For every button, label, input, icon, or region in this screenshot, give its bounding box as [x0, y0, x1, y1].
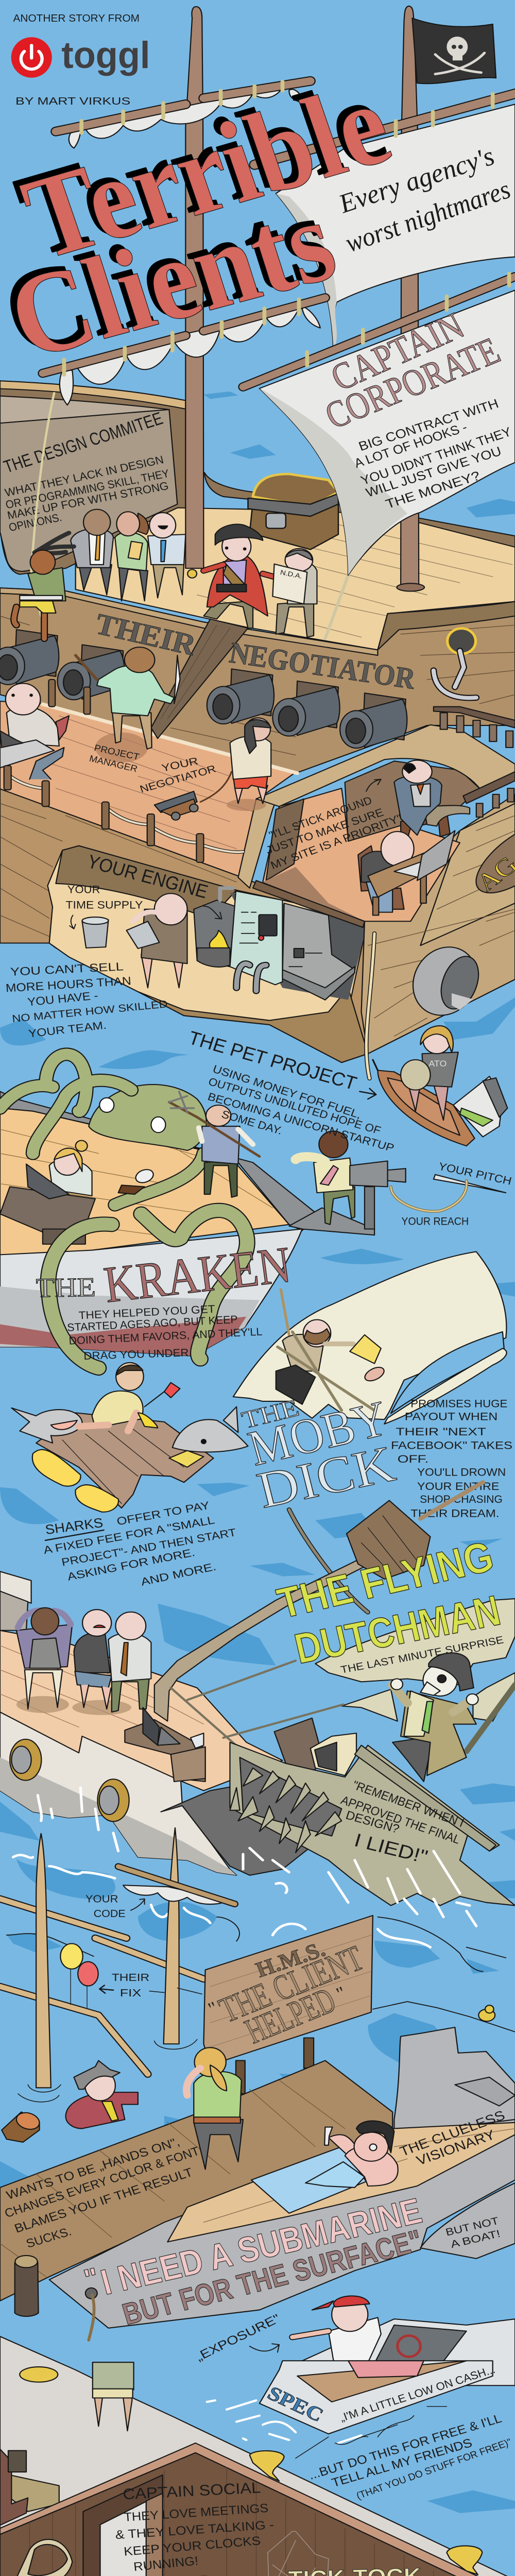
desk with laptop [125, 1707, 205, 1782]
your engine label: YOUR ENGINE [85, 851, 210, 903]
captain social text [115, 2479, 274, 2574]
mooring post [15, 2256, 39, 2316]
sign lettering: H.M.S. [252, 1937, 329, 1982]
moby dick heading: MOBY [243, 1390, 394, 1476]
kraken text: DOING THEM FAVORS, AND THEY'LL [68, 1325, 263, 1347]
captain social text: RUNNING! [133, 2554, 199, 2574]
flagpole mast [401, 6, 419, 588]
hull name text: THEIR [92, 607, 200, 662]
section: hms the client helped and the submarine [0, 1828, 515, 2364]
bollards [20, 2367, 482, 2574]
arrow to eye patch captain [366, 779, 381, 791]
title: Terrible Clients [0, 54, 405, 384]
captain corporate text: WILL JUST GIVE YOU [364, 444, 503, 500]
portholes [10, 1739, 129, 1821]
credit: another story from: ANOTHER STORY FROM [13, 13, 140, 24]
kraken text: STARTED AGES AGO, BUT KEEP [67, 1313, 238, 1334]
promises text start: PROMISES HUGE [410, 1398, 507, 1410]
submarine heading [80, 2191, 426, 2331]
poster illustration, lower [0, 2336, 515, 2576]
section: the kraken and pet project [0, 960, 515, 1424]
hms sign [203, 1916, 373, 2094]
right lower yard [243, 274, 515, 387]
mooring rope [366, 934, 374, 1078]
deck plank lines [0, 1126, 272, 1244]
captain corporate text: A LOT OF HOOKS - [352, 420, 469, 471]
moby dick text [391, 1426, 512, 1519]
stern name sign [464, 810, 515, 905]
your negotiator label: NEGOTIATOR [139, 763, 217, 795]
left masts and yards [0, 1828, 235, 2088]
upper hull side [0, 588, 515, 773]
captain social text: CAPTAIN SOCIAL [123, 2479, 261, 2503]
deck rope posts [4, 680, 243, 862]
pet project arrow [359, 1089, 376, 1099]
time text: NO MATTER HOW SKILLED [11, 998, 168, 1025]
balcony railings [434, 707, 515, 817]
dock text [3, 2135, 201, 2251]
scared staff figures [16, 1608, 151, 1715]
captain corporate heading: CAPTAIN [324, 304, 471, 399]
sea patches near whale [320, 1249, 515, 1293]
their fix label: THEIR [112, 1972, 149, 1984]
upper yard [56, 81, 311, 133]
rubber duck [478, 2005, 495, 2021]
swinging girl with rope [14, 393, 74, 639]
section: sharks, moby dick and flying dutchman [0, 1363, 515, 1906]
big top sail [276, 104, 515, 349]
time text [5, 960, 168, 1040]
pet project client figure: ATO [428, 1059, 447, 1069]
but not a boat text [444, 2215, 502, 2250]
eye patch captain figure [394, 760, 470, 840]
submarine heading: BUT FOR THE SURFACE" [118, 2224, 426, 2331]
crows nest barrel [347, 1482, 483, 1579]
time text: YOU HAVE - [27, 989, 99, 1008]
shark left [11, 1408, 82, 1443]
rope to sail [325, 575, 348, 639]
dock text: CHANGES EVERY COLOR & FONT [3, 2144, 201, 2221]
whale jaw [384, 1348, 507, 1424]
moby dick heading [238, 1390, 400, 1519]
crates on pier [0, 2449, 59, 2526]
title: Terrible Clients: Clients [0, 171, 344, 381]
sharks text: A FIXED FEE FOR A "SMALL [42, 1514, 216, 1556]
sign lettering: " [333, 1982, 349, 2004]
toggl logo [11, 35, 150, 78]
sub mooring rope [89, 2295, 94, 2340]
free work text: TELL ALL MY FRIENDS [330, 2436, 474, 2490]
byline: BY MART VIRKUS [15, 96, 130, 107]
sign lettering: THE CLIENT [213, 1938, 370, 2030]
cabin speech label [264, 794, 404, 872]
sharks text: OFFER TO PAY [115, 1499, 211, 1528]
your reach label: YOUR REACH [401, 1215, 469, 1227]
but not a boat text: A BOAT! [449, 2228, 502, 2250]
flying dutchman heading [272, 1533, 505, 1673]
pet project text: SOME DAY. [220, 1108, 284, 1137]
sign lettering [205, 1937, 370, 2051]
stern wall of white ship [0, 1571, 31, 1603]
the kraken heading: KRAKEN [100, 1235, 294, 1313]
hull name text [92, 607, 418, 696]
spec name: SPEC [264, 2382, 327, 2426]
second yard [254, 94, 515, 165]
the kraken heading: THE [36, 1272, 96, 1303]
toy cannon on leash [154, 791, 198, 820]
white ship deck [0, 1631, 283, 1791]
anchor and ring [434, 629, 476, 698]
pet project text [206, 1062, 396, 1154]
teal control console [230, 891, 283, 991]
committee figures [71, 510, 185, 601]
captain corporate figure [187, 524, 279, 628]
sharks text: ASKING FOR MORE. [66, 1546, 196, 1583]
hull name text: NEGOTIATOR [227, 636, 418, 696]
captain corporate text: YOU DIDN'T THINK THEY [359, 425, 513, 488]
clueless visionary figure [305, 2121, 398, 2188]
upper deck [76, 508, 515, 650]
moby dick heading: DICK [251, 1435, 400, 1519]
figure on pier [93, 2362, 134, 2431]
ghost sail lower [341, 1673, 515, 1721]
wooden sub deck [167, 2123, 515, 2242]
moby dick whale [233, 1252, 507, 1424]
man holding woman [108, 1612, 151, 1712]
the kraken heading [36, 1235, 294, 1313]
their fix label: FIX [120, 1988, 141, 1999]
label: design committee [1, 408, 170, 534]
label: design committee: OR PROGRAMMING SKILL, THEY [4, 467, 170, 511]
moby dick text: OFF. [398, 1453, 428, 1465]
but not a boat text: BUT NOT [444, 2215, 500, 2238]
your pitch label: YOUR PITCH [437, 1160, 513, 1188]
wave lines [7, 1917, 515, 2032]
cabin speech label: JUST TO MAKE SURE [264, 806, 385, 857]
title: Terrible Clients: Clients [0, 174, 349, 384]
moby dick heading: THE [238, 1394, 302, 1434]
pet project boat [373, 1060, 507, 1146]
dock text: BLAMES YOU IF THE RESULT [13, 2166, 195, 2235]
kraken text: THEY HELPED YOU GET [78, 1302, 215, 1321]
title: Terrible Clients: Terrible [3, 54, 399, 281]
kraken desk worker [0, 1141, 95, 1244]
ghost ropes [171, 1660, 344, 1754]
far bulwark [204, 472, 515, 548]
project manager label [88, 742, 141, 774]
dock [0, 2061, 392, 2301]
submarine tower [394, 2027, 515, 2134]
shark right [169, 1407, 248, 1467]
front mast [185, 7, 203, 568]
engine room floor and wall [47, 846, 368, 1062]
raft [36, 1413, 214, 1508]
pet project text: USING MONEY FOR FUEL, [211, 1062, 363, 1121]
fishing net [263, 2531, 329, 2576]
last minute surprise text: THE LAST MINUTE SURPRISE [340, 1634, 505, 1676]
spilled coffee cup [118, 1167, 156, 1194]
man hands on head [16, 1608, 72, 1709]
time supply label: TIME SUPPLY [66, 899, 143, 911]
sharks text: PROJECT"- AND THEN START [60, 1526, 237, 1568]
moby dick text: THEIR "NEXT [396, 1426, 486, 1438]
woman clinging [74, 1609, 112, 1709]
speedboat foam [207, 2400, 362, 2443]
lower deck [0, 701, 297, 876]
time supply label [66, 884, 143, 929]
your code label: CODE [94, 1908, 126, 1920]
i lied text: "REMEMBER WHEN I [350, 1778, 466, 1830]
golden contract paper [350, 1335, 381, 1364]
ghost ship teeth [230, 1768, 341, 1853]
kraken front tentacles [48, 1210, 247, 1368]
cabin back wall [345, 761, 479, 841]
whale eye [363, 1365, 387, 1384]
captain social text: & THEY LOVE TALKING - [115, 2518, 274, 2542]
floating barrel [2, 2110, 42, 2142]
lower left yard [43, 298, 325, 375]
kraken deck [0, 1108, 289, 1256]
i lied text: APPROVED THE FINAL [339, 1793, 462, 1847]
mast base [397, 583, 424, 591]
kraken ship hull [0, 1229, 302, 1356]
low on cash text: „I'M A LITTLE LOW ON CASH... [338, 2363, 497, 2424]
gangway plank [151, 619, 248, 738]
foam [151, 1883, 476, 1947]
sharks text: AND MORE. [140, 1560, 217, 1588]
cabin speech label: MY SITE IS A PRIORITY" [269, 812, 404, 872]
ghost ship mast right [467, 1685, 515, 1751]
submarine heading: I NEED A SUBMARINE [97, 2191, 426, 2302]
upper rolled sail [69, 88, 302, 148]
dock text: WANTS TO BE „HANDS ON", [5, 2135, 182, 2202]
ghost sail upper [315, 1599, 515, 1685]
quarterdeck wall [0, 381, 185, 574]
captain social text: THEY LOVE MEETINGS [124, 2501, 269, 2524]
title: Terrible Clients: Terrible [8, 57, 405, 284]
your negotiator figure [200, 718, 271, 811]
sign lettering: HELPED [239, 1980, 341, 2051]
whale mouth [391, 1332, 504, 1413]
kraken text [67, 1302, 263, 1362]
captain corporate sail [260, 290, 515, 575]
design committee board [0, 396, 177, 571]
trident man [169, 1092, 260, 1197]
pet project text: BECOMING A UNICORN STARTUP [206, 1090, 396, 1154]
cannons row [0, 619, 407, 748]
kraken head [89, 1084, 207, 1150]
man with arms crossed [148, 513, 185, 598]
splash foam strokes [13, 1788, 470, 1906]
sea wave patches [0, 392, 515, 2204]
project manager label: PROJECT [93, 742, 141, 762]
lower left rolled sail [60, 307, 320, 405]
time text: YOUR TEAM. [28, 1019, 107, 1040]
cabin floor [263, 788, 460, 921]
NDA figure [272, 549, 317, 637]
time text: MORE HOURS THAN [5, 974, 132, 994]
moby dick text: THEIR DREAM. [410, 1507, 499, 1519]
doorway [83, 2475, 163, 2576]
label: design committee: MAKE UP FOR WITH STRONG [6, 479, 169, 522]
distant wave [427, 2490, 515, 2513]
stern planking [362, 794, 515, 1054]
white ship hull [0, 1712, 236, 1875]
kraken text: DRAG YOU UNDER. [83, 1346, 192, 1362]
i lied text: I LIED!" [352, 1830, 430, 1868]
captain corporate text [352, 397, 513, 512]
clueless visionary label: VISIONARY [414, 2127, 497, 2168]
your code label [85, 1893, 145, 1920]
dark broken hull gap [161, 1785, 329, 1875]
ghost ship hull [230, 1742, 515, 1906]
stoker figure pouring bucket [127, 893, 187, 988]
broken ghost ship mast [154, 1510, 373, 1721]
project manager label: MANAGER [88, 753, 139, 774]
pirate flag [412, 18, 496, 83]
moby dick text: YOUR ENTIRE [417, 1480, 499, 1493]
speedboat hull [260, 2361, 493, 2434]
cabin speech label: "I'LL STICK AROUND [267, 794, 374, 841]
kraken ship rail [0, 1092, 317, 1230]
hull cannon port [403, 939, 487, 1024]
treasure chest NDA [248, 474, 338, 550]
your negotiator label: YOUR [160, 755, 199, 774]
label: design committee: THE DESIGN COMMITEE [1, 408, 165, 477]
skeleton captain [391, 1653, 478, 1782]
pet project text: OUTPUTS UNDILUTED HOPE OF [207, 1075, 383, 1137]
your code label: YOUR [85, 1893, 118, 1905]
ahab on whale [276, 1290, 374, 1411]
balloons [60, 1943, 98, 2008]
man in suit [71, 510, 113, 595]
NDA figure: N.D.A. [280, 568, 303, 580]
old monitor [274, 1718, 356, 1775]
subtitle: Every agency's [334, 141, 499, 219]
dock text: SUCKS. [24, 2225, 73, 2251]
time text: YOU CAN'T SELL [10, 960, 124, 978]
captain social text: KEEP YOUR CLOCKS [123, 2534, 261, 2558]
cabin dark passage [266, 799, 304, 880]
ripples [18, 1988, 202, 2102]
pet project client figure [401, 1026, 458, 1120]
i lied text [339, 1778, 466, 1868]
speedboat client figure top [283, 2296, 515, 2385]
captain corporate text: BIG CONTRACT WITH [357, 397, 501, 454]
harpoon gunner [296, 1131, 406, 1229]
toggl logo: toggl [61, 35, 150, 76]
sharks text [42, 1499, 237, 1588]
captain corporate text: THE MONEY? [384, 469, 482, 512]
label: design committee: OPINIONS. [7, 511, 63, 534]
sharks text: SHARKS [44, 1515, 104, 1537]
gray server cabinet [283, 903, 355, 1000]
submarine hull [49, 2120, 515, 2328]
main pirate ship hull [0, 381, 515, 1078]
floor beam [253, 880, 365, 927]
clueless visionary label: THE CLUELESS [398, 2108, 507, 2159]
moby dick text: YOU'LL DROWN [417, 1466, 506, 1478]
exposure text: „EXPOSURE" [194, 2312, 283, 2364]
free work text: ...BUT DO THIS FOR FREE & I'LL [307, 2412, 504, 2482]
their fix label [99, 1972, 149, 1999]
promises text start [405, 1398, 507, 1422]
desk worker with monitor [358, 831, 455, 916]
your pitch harpoon and rope [391, 1175, 506, 1211]
wading pool [251, 2147, 366, 2213]
lower hull [0, 789, 515, 1062]
man pointing in water [66, 2061, 138, 2129]
time supply label: YOUR [67, 884, 100, 895]
i lied text: DESIGN? [344, 1808, 401, 1836]
submarine heading: " [80, 2262, 102, 2295]
moby dick text: FACEBOOK" TAKES [391, 1439, 512, 1451]
wall top band [0, 2443, 515, 2576]
laptop worker figure [0, 684, 69, 779]
boiler with flame [194, 888, 235, 967]
project manager figure [76, 647, 180, 762]
harpoon bow platform [289, 1208, 374, 1235]
sign lettering: " [205, 1997, 221, 2019]
pier top [0, 2336, 515, 2576]
raft man [79, 1363, 180, 1431]
facepalm woman [186, 2047, 243, 2170]
shark jaws trophy [15, 2539, 72, 2576]
moby dick text: SHOP CHASING [420, 1493, 503, 1505]
woman with notes [115, 512, 148, 601]
cabin roof and jamb [238, 725, 515, 888]
label: design committee: WHAT THEY LACK IN DESIGN [4, 453, 165, 499]
wake lines [296, 2406, 447, 2458]
raft floats [32, 1450, 118, 1512]
kraken tentacles [0, 1054, 203, 1205]
cabin wall [0, 2453, 515, 2576]
promises text start: PAYOUT WHEN [405, 1410, 497, 1422]
pet project label: THE PET PROJECT [186, 1027, 359, 1094]
ghost ship mouth [240, 1757, 341, 1836]
bucket of time [82, 917, 108, 948]
